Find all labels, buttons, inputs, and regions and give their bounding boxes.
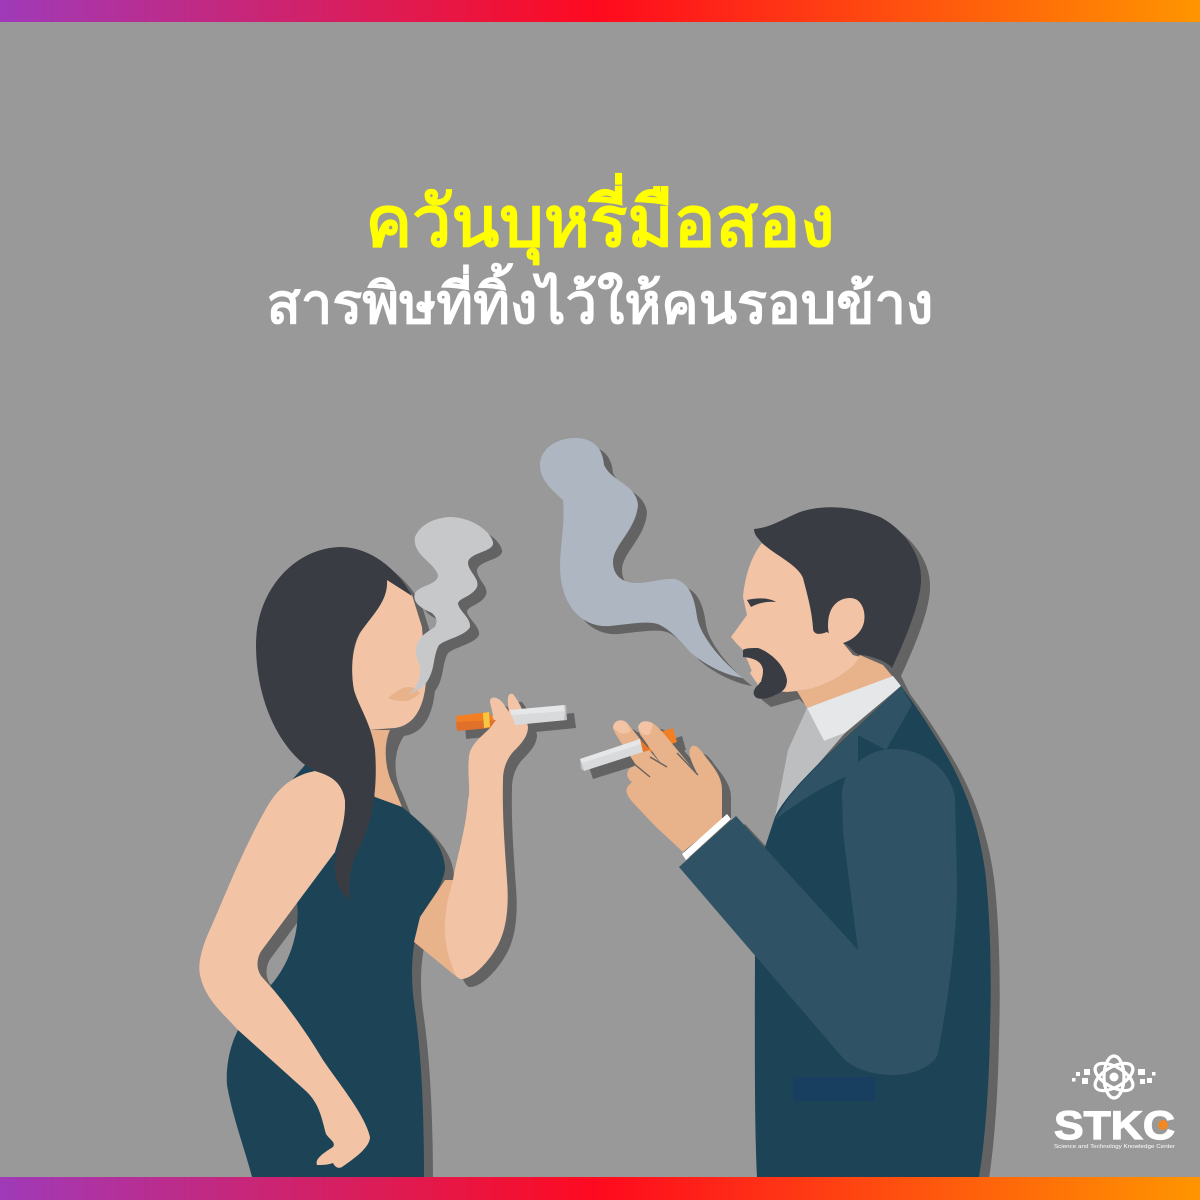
man eye bbox=[747, 598, 776, 607]
man cigarette bbox=[580, 739, 650, 771]
woman face bbox=[352, 580, 426, 730]
title line 2: สารพิษที่ทิ้งไว้ให้คนรอบข้าง bbox=[267, 263, 933, 335]
logo dots bbox=[1072, 1069, 1156, 1084]
man ear bbox=[828, 598, 864, 643]
bottom gradient bar bbox=[0, 1177, 1200, 1200]
logo atom icon bbox=[1091, 1056, 1137, 1098]
man far cigarette tip bbox=[645, 728, 677, 752]
man jacket bbox=[755, 686, 991, 1177]
logo: STKC bbox=[1054, 1056, 1175, 1150]
woman forearm and hand bbox=[445, 694, 528, 979]
woman dress bbox=[227, 765, 445, 1177]
logo orange dot bbox=[1158, 1120, 1168, 1130]
man jacket pocket bbox=[793, 1077, 875, 1101]
logo tagline: Science and Technology Knowledge Center bbox=[1054, 1144, 1175, 1150]
woman hair bbox=[256, 547, 412, 901]
man mouth bbox=[750, 662, 763, 682]
woman upper arm bbox=[414, 880, 465, 978]
man hand bbox=[613, 720, 722, 852]
man lapel bbox=[775, 686, 912, 820]
woman left arm bbox=[199, 771, 370, 1168]
man shirt cuff bbox=[682, 814, 731, 860]
man sleeve bbox=[679, 749, 957, 1075]
man neck bbox=[797, 655, 893, 708]
woman cigarette bbox=[456, 705, 567, 731]
top gradient bar bbox=[0, 0, 1200, 22]
man hand finger slits bbox=[633, 753, 698, 777]
man face bbox=[731, 543, 860, 692]
woman neck bbox=[360, 725, 402, 807]
man hair bbox=[754, 507, 921, 668]
man shirt bbox=[775, 708, 845, 817]
title line 1: ควันบุหรี่มือสอง bbox=[365, 172, 835, 266]
woman smoke bbox=[408, 517, 493, 695]
man smoke bbox=[540, 438, 743, 678]
woman lips bbox=[388, 687, 420, 701]
man figure bbox=[580, 507, 991, 1177]
woman figure bbox=[199, 547, 567, 1177]
man hand fingernails bbox=[613, 720, 653, 735]
title bbox=[267, 172, 933, 335]
drop shadows of figures and smoke bbox=[208, 446, 1000, 1185]
man beard bbox=[743, 648, 787, 699]
logo wordmark: STKC bbox=[1054, 1104, 1175, 1148]
man collar bbox=[807, 676, 901, 741]
